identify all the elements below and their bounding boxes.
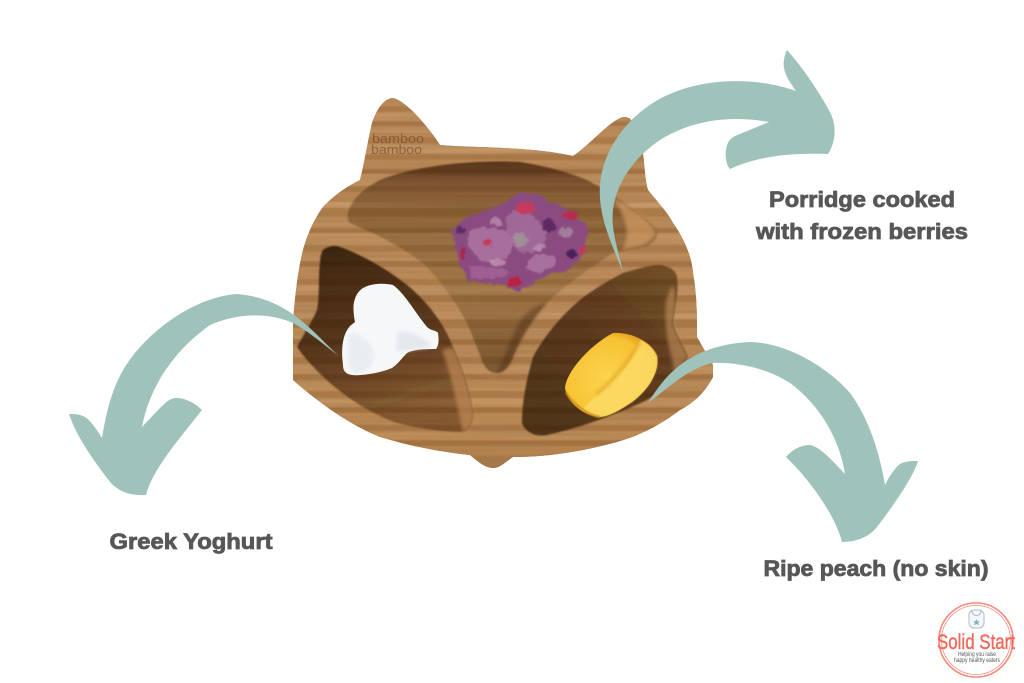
logo: Solid Start: happy healthy eaters [954, 657, 1000, 664]
plate well: top [348, 162, 657, 373]
label: porridge: Porridge cooked [769, 187, 955, 212]
food: greek yoghurt [342, 284, 439, 375]
logo: Solid Start: Helping you raise [958, 651, 996, 658]
plate brand mark: bamboo [372, 132, 424, 146]
fox-shaped bamboo plate [285, 90, 725, 475]
label: porridge [755, 187, 968, 244]
icon: bib [969, 610, 984, 628]
food: ripe peach [565, 333, 657, 417]
plate brand mark: bamboo [371, 143, 422, 157]
label: ripe peach: Ripe peach (no skin) [764, 556, 988, 581]
plate well: right [522, 265, 688, 435]
label: greek yoghurt: Greek Yoghurt [110, 529, 273, 554]
arrow: to porridge label [600, 50, 835, 272]
arrow: to peach label [648, 342, 918, 542]
plate well: left [297, 246, 473, 432]
label: porridge: with frozen berries [755, 219, 968, 244]
food: porridge with frozen berries [453, 192, 587, 292]
plate brand mark [371, 132, 424, 157]
logo: Solid Start [937, 603, 1015, 677]
arrow: to yoghurt label [69, 294, 339, 495]
